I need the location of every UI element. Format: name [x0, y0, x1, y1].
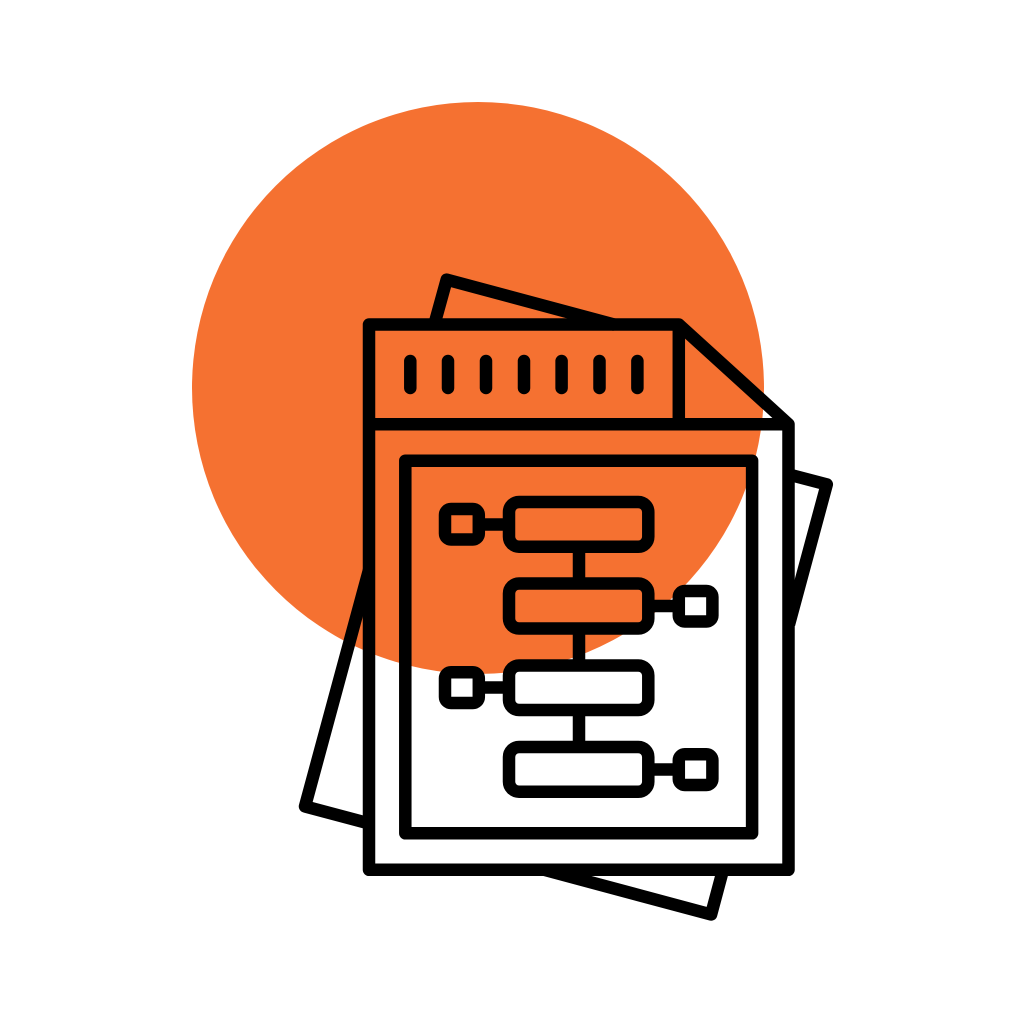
flowchart step 4	[509, 747, 648, 792]
small node 4	[679, 754, 712, 785]
small node 2	[679, 591, 712, 622]
small node 3	[445, 672, 479, 703]
connector lines	[479, 524, 679, 770]
flowchart step 2	[509, 584, 648, 628]
flowchart step 3	[509, 666, 648, 710]
back sheet of paper	[305, 280, 827, 915]
orange background circle	[192, 102, 764, 674]
flowchart diagram	[445, 502, 712, 792]
inner frame	[405, 461, 752, 833]
small node 1	[445, 509, 479, 540]
flowchart step 1	[509, 502, 648, 547]
header tick marks	[410, 361, 637, 388]
front document page	[369, 324, 788, 870]
